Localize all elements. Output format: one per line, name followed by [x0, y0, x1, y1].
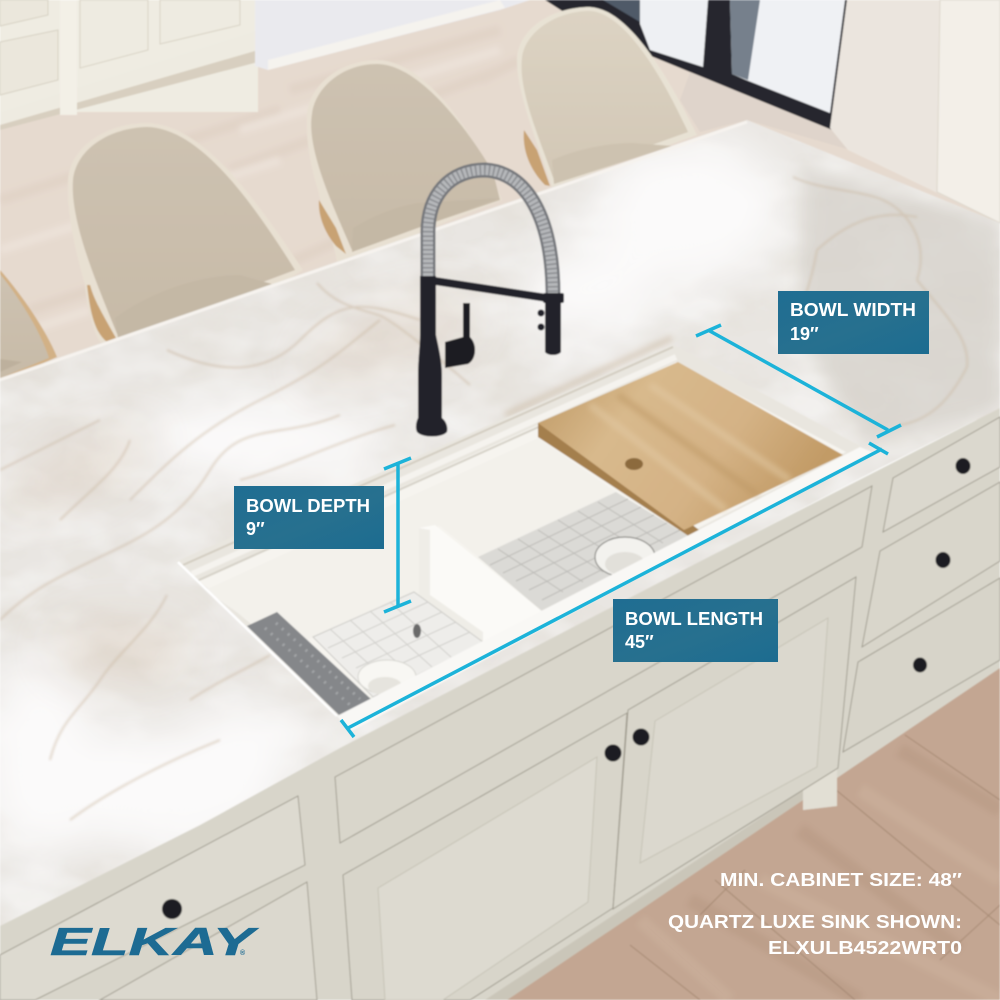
- logo: Elkay: ELKAY: [50, 921, 259, 964]
- marble: bright patches: [0, 135, 785, 860]
- dimension: bowl width: [696, 325, 901, 437]
- door: right: [613, 577, 856, 909]
- sink: left overhang edge: [178, 562, 337, 716]
- note: minimum cabinet size: MIN. CABINET SIZE: 48″: [720, 870, 962, 890]
- faucet: sprayer: [538, 293, 564, 355]
- marble: light mottling: [0, 155, 853, 921]
- sink: gray rack: [247, 612, 372, 716]
- drawer: lower left upper: [0, 796, 305, 1000]
- label: bowl width: BOWL WIDTH: [790, 300, 916, 320]
- sink: front rim: [337, 447, 872, 732]
- note: sink shown: ELXULB4522WRT0: [768, 938, 962, 958]
- faucet: bar: [435, 277, 547, 302]
- sink: back ledge: [183, 347, 676, 581]
- room: wall: [255, 0, 530, 70]
- toe kick: [485, 790, 803, 1000]
- door: left: [343, 713, 627, 1000]
- sink: right grid: [478, 492, 690, 612]
- drawer: lower left lower: [100, 882, 317, 1000]
- knob: lower left: [162, 899, 182, 919]
- room: windows: [510, 0, 850, 130]
- sink: interior: [198, 362, 846, 707]
- sink: back wall: [205, 438, 616, 650]
- room: back cabinets: [0, 0, 258, 130]
- drawer: right top: [883, 417, 1000, 532]
- room: right wall: [830, 0, 1000, 223]
- faucet: coil hose: [428, 170, 553, 296]
- sink: left grid: [313, 592, 483, 697]
- drawer: right bottom: [843, 578, 1000, 752]
- faucet: [416, 170, 564, 436]
- label: bowl width: [778, 291, 929, 354]
- cabinet base: [0, 408, 1000, 1000]
- label: bowl width: 19″: [790, 324, 819, 344]
- note: sink shown: QUARTZ LUXE SINK SHOWN:: [668, 912, 962, 932]
- chair: right: [517, 7, 697, 187]
- marble: sink back shadow: [505, 338, 672, 415]
- faucet: handle: [445, 303, 475, 368]
- floor: lower right: [507, 668, 1000, 1000]
- dimension: bowl length: [341, 443, 888, 737]
- note: sink shown: [668, 912, 962, 958]
- board hole: [625, 458, 643, 470]
- label: bowl length: 45″: [625, 632, 654, 652]
- marble: grey right side: [800, 165, 1000, 440]
- label: bowl length: [613, 599, 778, 662]
- drawer: long upper panel: [335, 486, 872, 843]
- logo: Elkay: ®: [240, 949, 246, 957]
- faucet: body: [416, 276, 447, 436]
- sink: divider: [419, 525, 543, 642]
- marble: counter edge highlight: [0, 122, 747, 380]
- marble: warm patches: [0, 283, 484, 680]
- label: bowl depth: 9″: [246, 519, 265, 539]
- chairs: [0, 7, 697, 382]
- sink: rim: [177, 345, 862, 716]
- drawer: right middle: [862, 482, 1000, 647]
- marble: veins: [0, 177, 967, 820]
- chair: left: [68, 123, 303, 345]
- sink: [177, 345, 872, 732]
- clip hardware: [413, 624, 421, 638]
- floor: upper room: [0, 0, 1000, 420]
- knob: door left: [604, 744, 622, 762]
- logo: Elkay: [50, 921, 259, 964]
- knob: door right: [632, 728, 650, 746]
- knob: right bottom: [913, 658, 927, 672]
- cabinet leg: [803, 768, 837, 810]
- drain: left: [358, 660, 416, 695]
- label: bowl depth: [234, 486, 384, 549]
- knob: right top: [956, 458, 970, 474]
- drain: right: [595, 537, 655, 577]
- dimension: bowl depth: [384, 458, 411, 612]
- chair: middle: [307, 60, 502, 262]
- room: floor by window: [680, 72, 850, 150]
- label: bowl depth: BOWL DEPTH: [246, 496, 370, 516]
- sink: cutting board: [538, 362, 843, 537]
- knob: right middle: [936, 552, 950, 568]
- label: bowl length: BOWL LENGTH: [625, 609, 763, 629]
- chair: far left: [0, 270, 57, 382]
